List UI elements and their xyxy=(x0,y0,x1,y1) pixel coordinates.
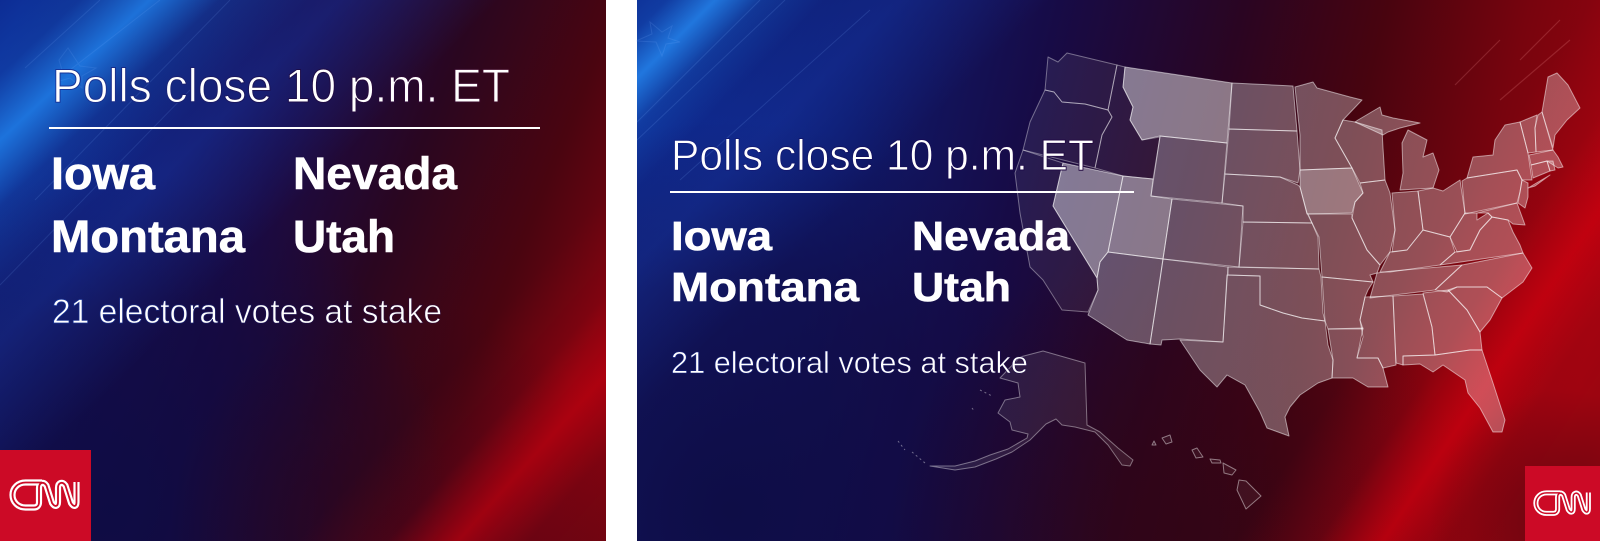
electoral votes note: 21 electoral votes at stake xyxy=(52,293,442,331)
state list xyxy=(671,213,1071,310)
CNN logo left xyxy=(0,450,91,541)
state list: Iowa xyxy=(671,213,773,259)
Hawaii xyxy=(1152,435,1261,509)
CNN logo right xyxy=(1525,466,1600,541)
Alaska xyxy=(930,351,1133,470)
Aleutian and Alaskan islands xyxy=(898,390,992,463)
state list: Nevada xyxy=(293,148,458,199)
heading: poll closing time: Polls close 10 p.m. ET xyxy=(52,59,510,112)
left card background xyxy=(0,0,606,541)
panel: left card xyxy=(0,0,606,541)
state list: Utah xyxy=(293,211,395,262)
pacific northwest and California, faint fill xyxy=(1015,53,1160,312)
electoral votes note: 21 electoral votes at stake xyxy=(671,345,1028,380)
divider rule xyxy=(670,191,1134,193)
state list: Utah xyxy=(912,264,1011,310)
panel: right card xyxy=(636,0,1600,541)
heading: poll closing time: Polls close 10 p.m. ET xyxy=(671,131,1094,180)
state list xyxy=(51,148,458,262)
lower 48 remaining states xyxy=(1088,73,1580,436)
right card background xyxy=(636,0,1600,541)
state list: Montana xyxy=(671,264,860,310)
state list: Iowa xyxy=(51,148,156,199)
highlighted states: Montana, Nevada, Utah, Iowa xyxy=(1053,67,1363,278)
state list: Nevada xyxy=(912,213,1071,259)
divider rule xyxy=(49,127,540,129)
state list: Montana xyxy=(51,211,246,262)
US map xyxy=(898,53,1580,509)
